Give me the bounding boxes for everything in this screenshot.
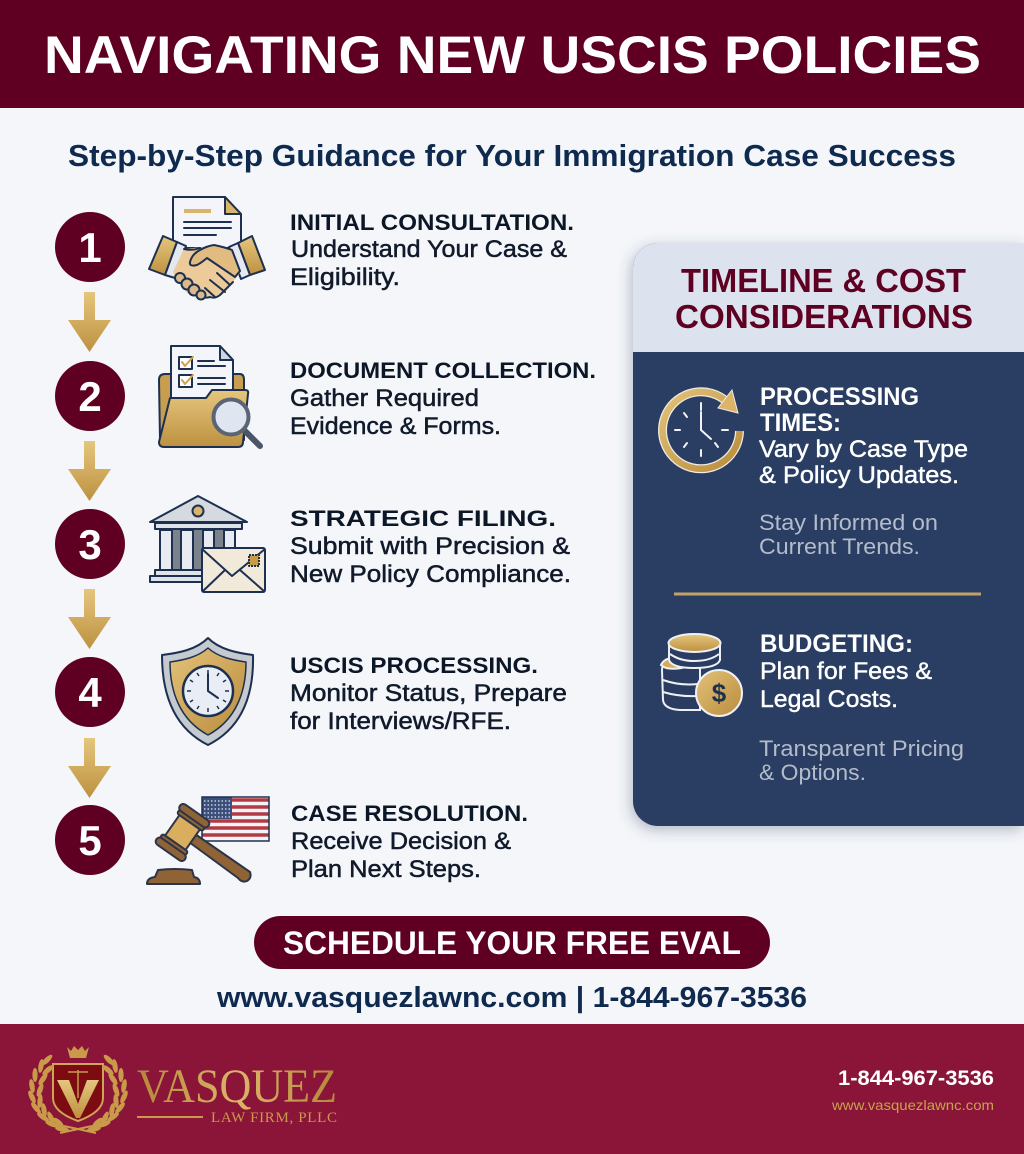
step 2 text: DOCUMENT COLLECTION. (290, 358, 596, 383)
logo: crest (27, 1046, 129, 1133)
icon: handshake and document (149, 197, 265, 300)
icon: coin stack with dollar: $ (712, 678, 727, 708)
processing times text: & Policy Updates. (759, 462, 959, 489)
step 4 text: USCIS PROCESSING. (290, 653, 538, 678)
step 2 text (290, 358, 596, 440)
arrow 3 to 4 (68, 589, 111, 649)
step 2 number (55, 361, 125, 431)
budgeting text: BUDGETING: (760, 630, 913, 658)
budgeting text: Transparent Pricing (759, 736, 964, 761)
step 5 text: CASE RESOLUTION. (291, 801, 528, 826)
step 4 number: 4 (78, 669, 102, 716)
title: NAVIGATING NEW USCIS POLICIES (44, 26, 981, 85)
footer band (0, 1024, 1024, 1154)
panel heading: CONSIDERATIONS (675, 299, 973, 336)
budgeting text: & Options. (759, 760, 866, 785)
step 5 number (55, 805, 125, 875)
step 4 text: Monitor Status, Prepare (290, 680, 567, 707)
step 5 text: Receive Decision & (291, 828, 511, 855)
step 1 number: 1 (78, 224, 102, 271)
step 4 number (55, 657, 125, 727)
step 3 text: Submit with Precision & (290, 533, 570, 560)
panel heading (675, 263, 973, 336)
panel heading: TIMELINE & COST (681, 263, 967, 300)
budgeting text (759, 630, 964, 785)
call to action button: SCHEDULE YOUR FREE EVAL (283, 925, 741, 961)
processing times text: Vary by Case Type (759, 436, 968, 463)
arrow 4 to 5 (68, 738, 111, 798)
step 5 number: 5 (78, 817, 102, 864)
call to action button (254, 916, 770, 969)
processing times text (759, 383, 968, 559)
budgeting text: Plan for Fees & (760, 658, 932, 685)
icon: gavel and american flag (147, 797, 269, 884)
subtitle: Step-by-Step Guidance for Your Immigration Case Success (68, 138, 956, 173)
step 1 number (55, 212, 125, 282)
icon: courthouse and envelope (150, 496, 265, 592)
processing times text: PROCESSING (760, 383, 919, 411)
icon: coin stack with dollar (661, 634, 742, 716)
processing times text: Stay Informed on (759, 510, 938, 535)
icon: clock with circular arrow (663, 390, 740, 469)
step 1 text (290, 210, 574, 291)
step 5 text (291, 801, 528, 883)
logo: wordmark: VASQUEZ (137, 1060, 337, 1113)
contact line: www.vasquezlawnc.com | 1-844-967-3536 (216, 982, 807, 1014)
step 3 text: New Policy Compliance. (290, 561, 571, 588)
panel: timeline and cost considerations (633, 243, 1024, 826)
step 1 text: Understand Your Case & (291, 236, 567, 263)
step 2 text: Evidence & Forms. (290, 413, 501, 440)
arrow 2 to 3 (68, 441, 111, 501)
step 2 number: 2 (78, 373, 102, 420)
step 4 text (290, 653, 567, 735)
step 3 text (290, 506, 571, 588)
step 3 text: STRATEGIC FILING. (290, 506, 556, 531)
step 4 text: for Interviews/RFE. (290, 708, 511, 735)
step 5 text: Plan Next Steps. (291, 856, 481, 883)
budgeting text: Legal Costs. (760, 686, 898, 713)
step 2 text: Gather Required (290, 385, 479, 412)
step 1 text: Eligibility. (290, 264, 400, 291)
footer website: www.vasquezlawnc.com (831, 1097, 994, 1113)
header banner (0, 0, 1024, 108)
logo: wordmark: LAW FIRM, PLLC (211, 1110, 337, 1126)
processing times text: Current Trends. (759, 534, 920, 559)
processing times text: TIMES: (760, 409, 841, 437)
footer phone: 1-844-967-3536 (838, 1067, 994, 1090)
icon: shield with clock (162, 638, 253, 745)
step 1 text: INITIAL CONSULTATION. (290, 210, 574, 235)
step 3 number (55, 509, 125, 579)
step 3 number: 3 (78, 521, 102, 568)
icon: folder with checklist and magnifier (159, 346, 260, 447)
arrow 1 to 2 (68, 292, 111, 352)
